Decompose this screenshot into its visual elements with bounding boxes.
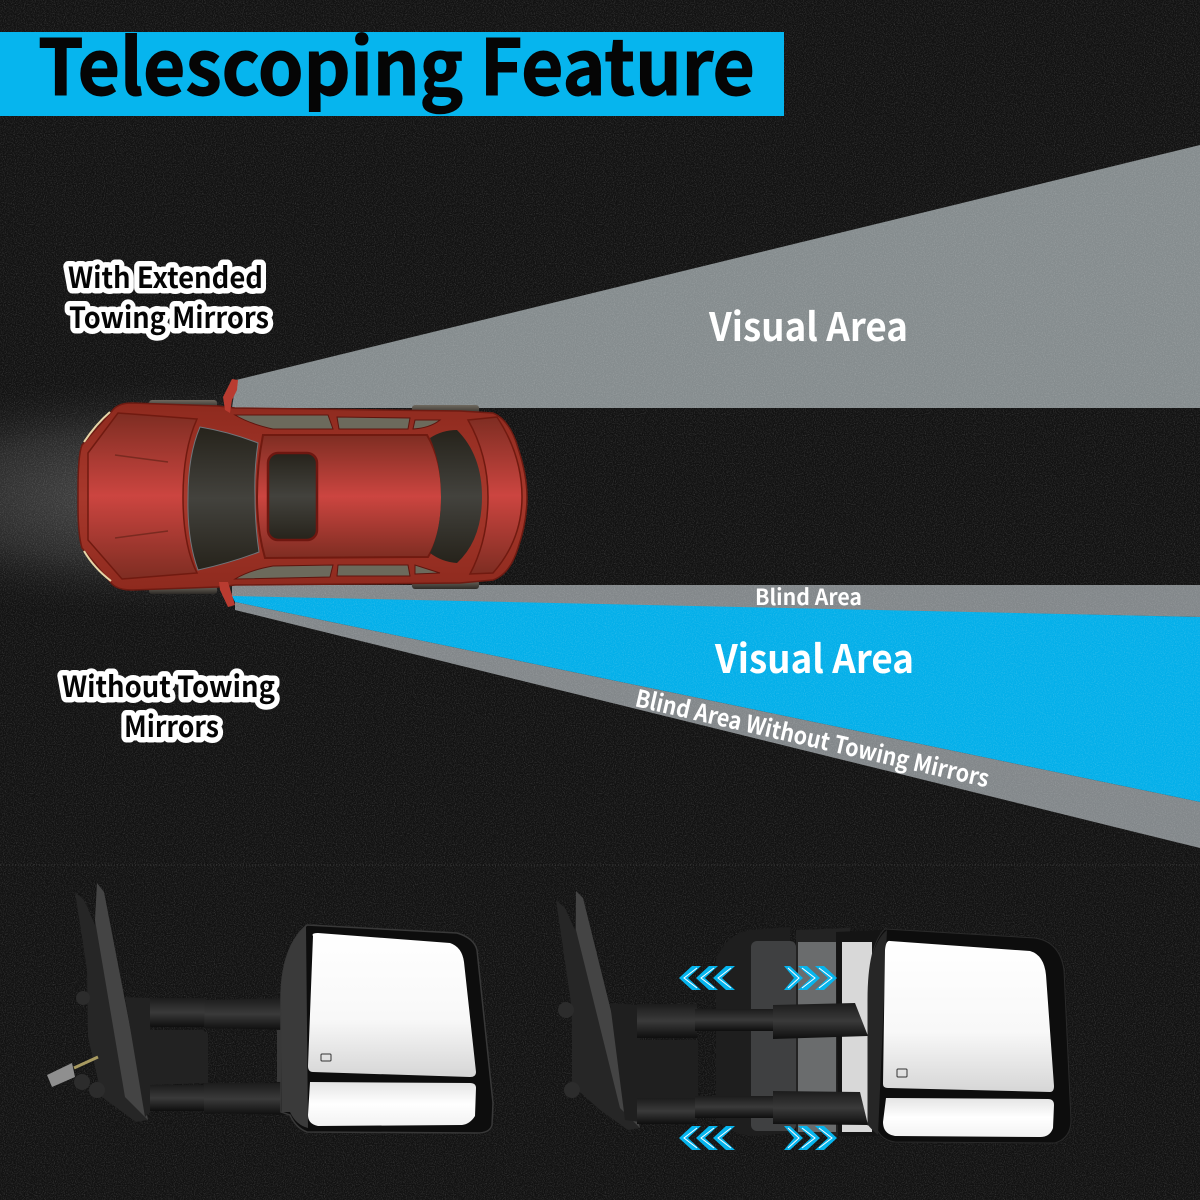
housing [868, 929, 1071, 1143]
label: lower visual area: Visual Area [714, 629, 914, 685]
heading: with extended towing mirrors [68, 255, 269, 337]
upper side mirror [223, 379, 238, 413]
label: blind area without towing mirrors: Blind Area Without Towing Mirrors [632, 679, 993, 794]
mounting bracket [556, 891, 640, 1130]
hood [88, 413, 197, 579]
title banner [0, 7, 784, 118]
headlights [84, 412, 110, 442]
car body [78, 403, 527, 590]
defrost icon [897, 1069, 907, 1077]
spot glass [308, 1082, 476, 1126]
main glass [308, 933, 476, 1077]
right mirror: extended [556, 891, 1071, 1143]
upper visual area wedge [232, 145, 1200, 408]
lower arm [637, 1098, 697, 1124]
side windows bottom [235, 565, 440, 579]
car top view [78, 379, 527, 607]
roof [257, 435, 442, 558]
heading: without towing mirrors [62, 664, 275, 746]
main glass [883, 941, 1054, 1092]
left mirror: retracted [47, 883, 493, 1133]
label: upper visual area: Visual Area [708, 297, 908, 353]
arrows: upper left chevrons [679, 966, 735, 990]
housing [281, 925, 493, 1133]
mounting bracket [75, 883, 148, 1122]
heading: without towing mirrors: Without Towing [62, 664, 275, 706]
side windows top [235, 415, 440, 429]
spot glass [883, 1098, 1054, 1137]
heading: with extended towing mirrors: Towing Mirrors [69, 295, 269, 337]
rear window [430, 430, 482, 563]
background glow [0, 372, 570, 622]
windshield [188, 427, 259, 570]
title: Telescoping Feature [38, 7, 755, 118]
tailgate [468, 417, 522, 574]
upper arm [637, 1004, 697, 1038]
arrows: upper right chevrons [784, 966, 837, 990]
lower blind area wedge [235, 602, 1200, 848]
label: blind area: Blind Area [755, 580, 862, 612]
blue visual area wedge [232, 596, 1200, 802]
arm tubes [150, 998, 205, 1027]
hood creases [115, 455, 168, 538]
arm body [125, 997, 208, 1117]
blind area band [232, 585, 1200, 617]
dotted divider [0, 864, 1200, 866]
heading: with extended towing mirrors: With Extended [68, 255, 263, 297]
defrost icon [321, 1054, 331, 1061]
heading: without towing mirrors: Mirrors [124, 704, 219, 746]
ghost positions [716, 927, 790, 1136]
connector [47, 1063, 75, 1087]
lower side mirror [219, 582, 235, 607]
sunroof [268, 453, 317, 540]
arm body [610, 1003, 698, 1122]
arrows: lower left chevrons [679, 1126, 735, 1150]
tires [149, 400, 479, 594]
arrows: lower right chevrons [784, 1126, 837, 1150]
